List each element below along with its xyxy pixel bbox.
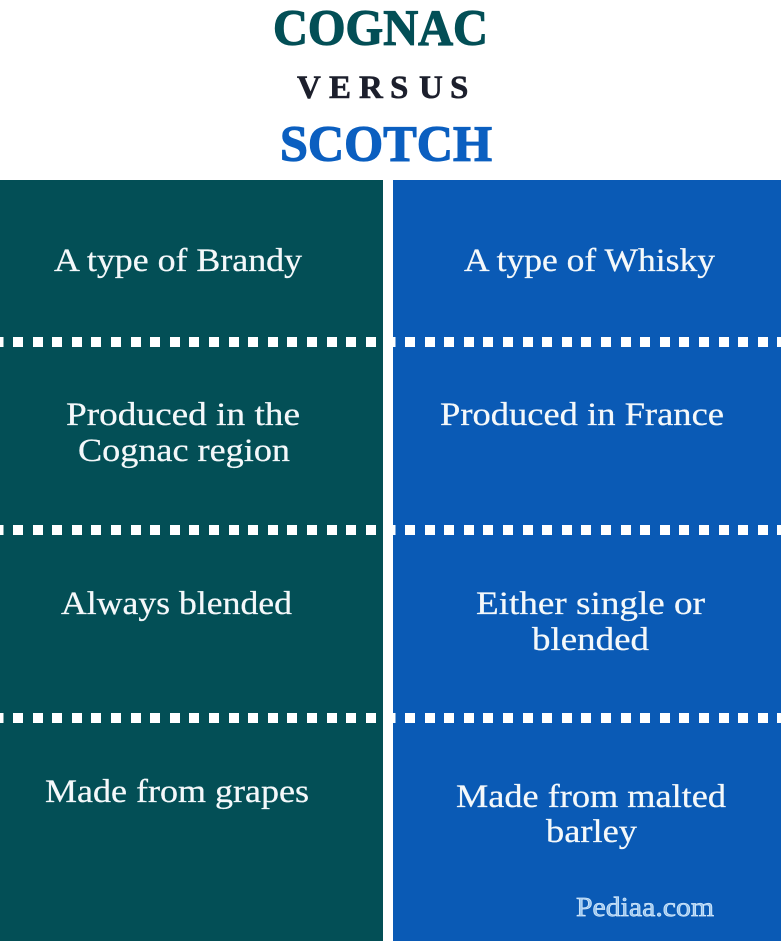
title block: [273, 1, 492, 173]
panel: cognac: [0, 180, 383, 941]
text: made from malted barley: barley: [546, 814, 638, 850]
text: produced in the cognac region: [66, 397, 300, 469]
divider row 2: [0, 525, 781, 535]
panel: scotch: [393, 180, 781, 941]
text: produced in the cognac region: Produced in the: [66, 397, 300, 433]
logo: pediaa.com: Pediaa.com: [576, 892, 714, 922]
text: made from malted barley: Made from malted: [456, 779, 727, 815]
text: produced in france: Produced in France: [440, 397, 724, 433]
divider row 1: [0, 337, 781, 347]
text: either single or blended: blended: [532, 622, 650, 658]
text: produced in the cognac region: Cognac region: [78, 433, 290, 469]
heading: cognac: COGNAC: [273, 1, 488, 57]
text: a type of whisky: A type of Whisky: [464, 243, 716, 279]
text: a type of brandy: A type of Brandy: [54, 243, 303, 279]
text: always blended: Always blended: [61, 586, 293, 622]
text: either single or blended: [476, 586, 705, 658]
text: made from grapes: Made from grapes: [45, 774, 309, 810]
heading: versus: VERSUS: [297, 70, 468, 106]
text: either single or blended: Either single or: [476, 586, 705, 622]
divider row 3: [0, 713, 781, 723]
heading: scotch: SCOTCH: [280, 117, 492, 173]
text: made from malted barley: [456, 779, 727, 850]
